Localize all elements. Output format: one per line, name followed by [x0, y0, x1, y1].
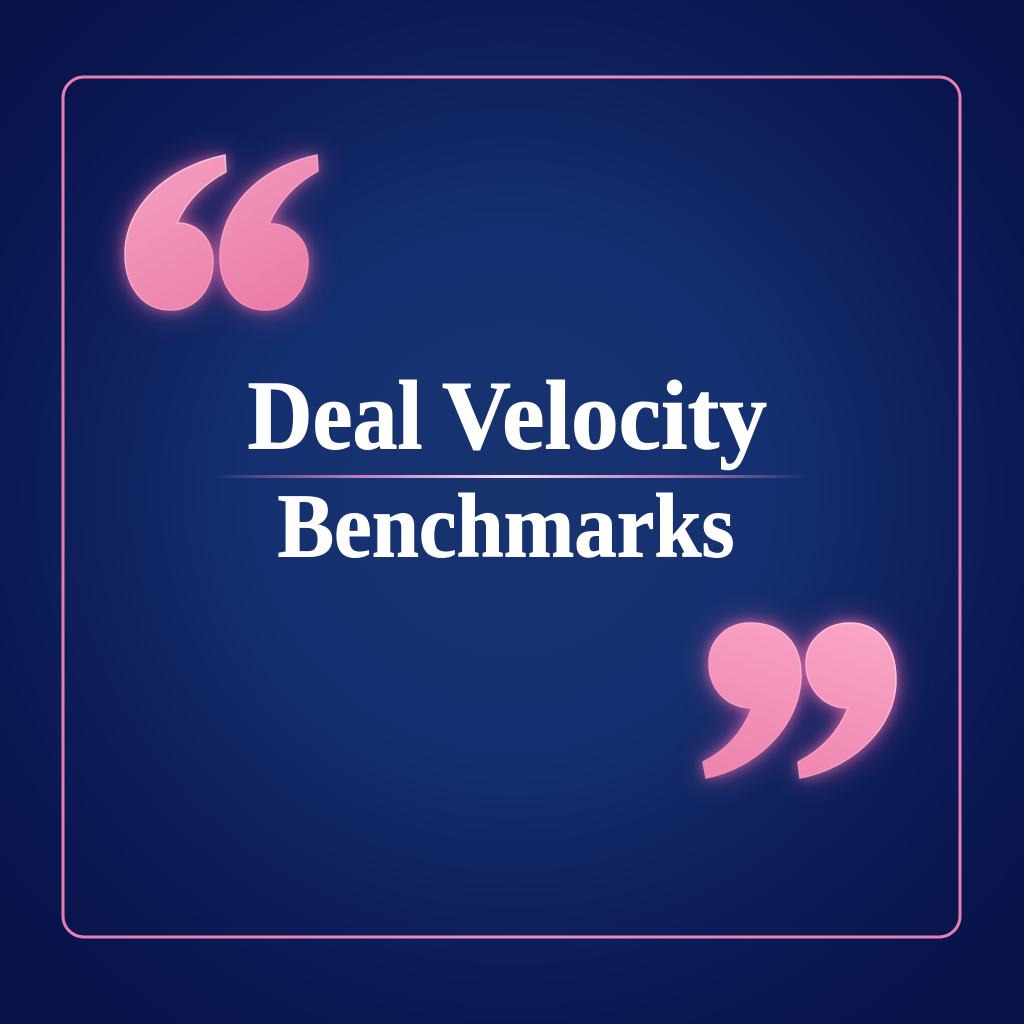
title: Deal Velocity Benchmarks: Benchmarks — [278, 476, 734, 576]
title: Deal Velocity Benchmarks: Velocity — [442, 362, 767, 470]
title: Deal Velocity Benchmarks — [248, 362, 767, 576]
divider between title lines — [212, 475, 808, 478]
rounded frame — [63, 77, 960, 937]
title: Deal Velocity Benchmarks: Deal — [248, 362, 422, 470]
icon: opening quotation marks — [125, 155, 318, 310]
icon: closing quotation marks — [703, 623, 896, 778]
